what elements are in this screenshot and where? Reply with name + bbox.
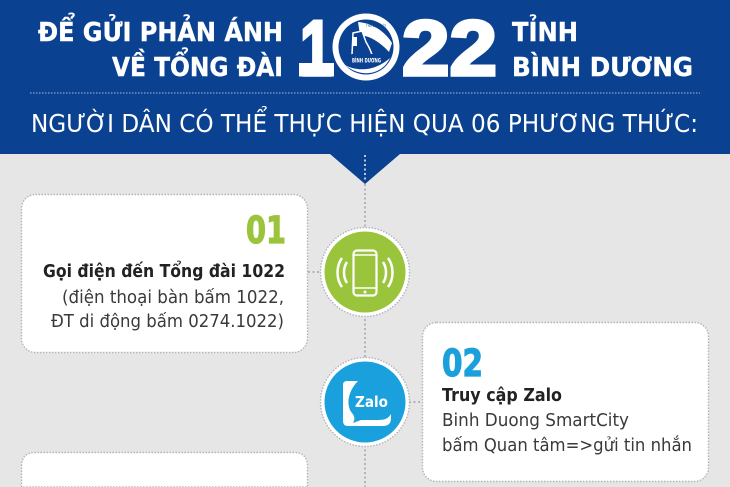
method 02 title: Truy cập Zalo xyxy=(442,386,562,406)
connector: central dotted line xyxy=(364,184,366,487)
number 02: 02 xyxy=(442,342,483,385)
icon: Binh Duong emblem: THỦ DẦU MỘT xyxy=(365,23,387,28)
icon: Binh Duong emblem: BÌNH DƯƠNG xyxy=(352,56,381,64)
heading: hotline number 1022 xyxy=(299,4,497,92)
method 01 title: Gọi điện đến Tổng đài 1022 xyxy=(43,260,285,282)
icon: Zalo in blue circle: Zalo xyxy=(355,393,388,411)
heading: right title xyxy=(512,13,693,83)
heading: left title xyxy=(38,11,283,83)
heading: right title: TỈNH xyxy=(512,13,578,48)
panel: method 02 xyxy=(422,322,708,482)
heading: right title: BÌNH DƯƠNG xyxy=(512,51,693,83)
heading: left title: ĐỂ GỬI PHẢN ÁNH xyxy=(38,11,283,48)
panel: method 03 (cropped) xyxy=(22,452,308,487)
method 01 description: (điện thoại bàn bấm 1022, xyxy=(62,287,284,308)
method 02 description: Binh Duong SmartCity xyxy=(442,411,629,431)
icon: smartphone in green circle xyxy=(320,228,410,316)
method 02 description: bấm Quan tâm=>gửi tin nhắn xyxy=(442,435,692,456)
method 02 description xyxy=(442,411,692,456)
heading: hotline number 1022: 22 xyxy=(402,4,497,92)
method 01 description xyxy=(51,287,284,332)
connector: card 01 to circle xyxy=(308,271,322,273)
heading: left title: VỀ TỔNG ĐÀI xyxy=(112,45,283,83)
panel: method 01 xyxy=(22,194,308,352)
method 01 description: ĐT di động bấm 0274.1022) xyxy=(51,311,284,332)
number 01: 01 xyxy=(246,209,286,252)
icon: Binh Duong emblem xyxy=(332,14,400,80)
heading: hotline number 1022: 1 xyxy=(300,4,332,92)
connector: circle to card 02 xyxy=(409,401,422,403)
icon: Zalo in blue circle xyxy=(320,358,410,446)
header band xyxy=(0,0,730,184)
